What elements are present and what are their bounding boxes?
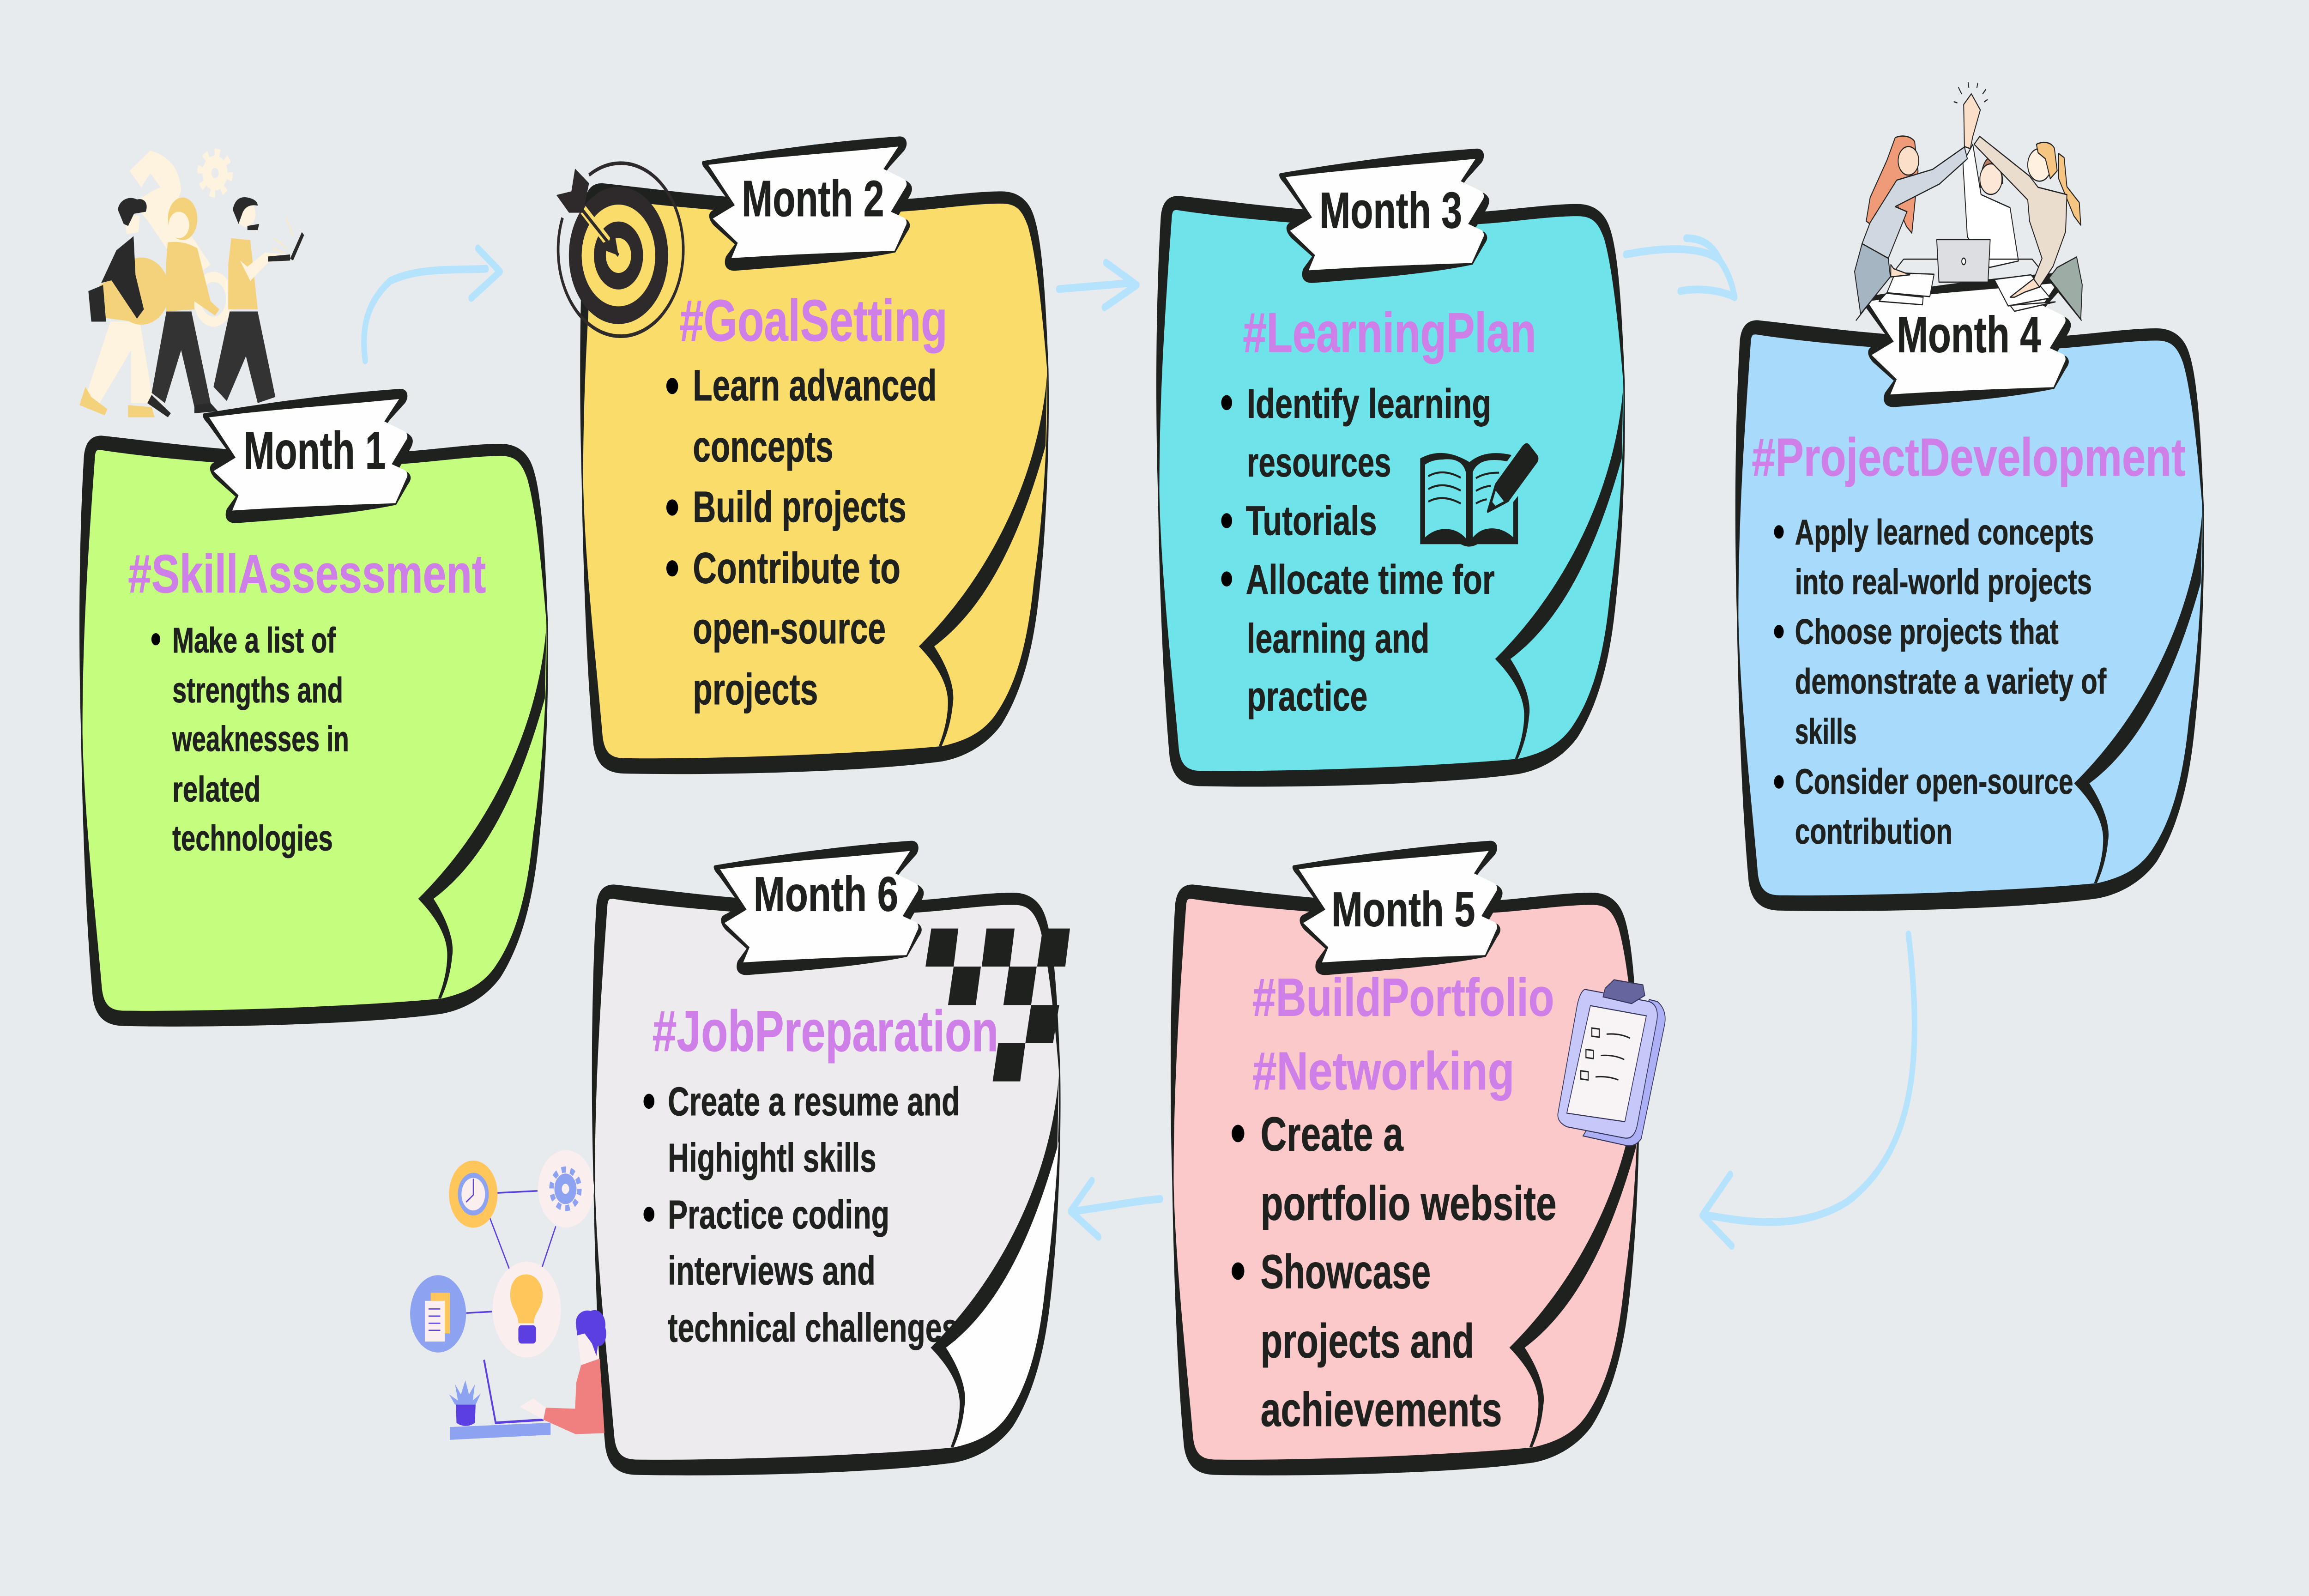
bullet list: strengths and (172, 671, 343, 710)
month tape (1279, 149, 1489, 283)
month tape: Month 5 (1331, 882, 1475, 937)
bullet list: into real-world projects (1795, 562, 2092, 602)
month tape: Month 6 (754, 866, 898, 922)
month tape (1861, 273, 2071, 407)
panel: month 2 (556, 136, 1049, 774)
icon: checkered flag pattern (925, 929, 1070, 1082)
bullet list: Apply learned concepts (1795, 513, 2094, 552)
icon: clipboard checklist (1558, 980, 1665, 1146)
note shape (580, 183, 1049, 774)
month tape (1293, 841, 1503, 975)
bullet list: projects (693, 665, 818, 714)
bullet list: Create a resume and (668, 1079, 960, 1124)
bullet list: Contribute to (693, 544, 901, 592)
note shape (1156, 196, 1625, 787)
month tape (702, 136, 912, 271)
bullet list (1221, 380, 1495, 719)
heading: #JobPreparation (653, 999, 998, 1064)
heading: networking: #Networking (1252, 1041, 1514, 1101)
bullet list: interviews and (668, 1249, 876, 1294)
heading: #LearningPlan (1243, 302, 1536, 364)
month tape (714, 841, 924, 975)
heading: #ProjectDevelopment (1752, 427, 2186, 487)
bullet list: Choose projects that (1795, 612, 2059, 652)
bullet list: learning and (1247, 615, 1429, 661)
panel: month 6 (592, 841, 1070, 1475)
icon: target with dart (556, 163, 683, 336)
bullet list: Showcase (1261, 1245, 1431, 1299)
bullet list: open-source (693, 604, 886, 653)
arrow: month 4 to month 5 (1702, 934, 1915, 1246)
note shape (1171, 884, 1639, 1475)
arrow: month 5 to month 6 (1070, 1181, 1161, 1237)
bullet list: Make a list of (172, 621, 336, 660)
bullet list: Create a (1261, 1108, 1404, 1161)
bullet list: Practice coding (668, 1192, 889, 1237)
bullet list: Build projects (693, 482, 907, 532)
panel: month 5 (1171, 841, 1665, 1475)
bullet list: concepts (693, 422, 834, 471)
month tape: Month 1 (244, 421, 386, 480)
bullet list: projects and (1261, 1315, 1474, 1368)
heading: #GoalSetting (679, 288, 948, 353)
heading: build portfolio: #BuildPortfolio (1252, 967, 1554, 1028)
month tape (203, 389, 413, 523)
bullet list: contribution (1795, 812, 1952, 852)
bullet list (151, 621, 349, 858)
panel: month 1 (79, 389, 548, 1027)
bullet list: Highightl skills (668, 1136, 876, 1180)
arrow: month 3 to month 4 (1626, 238, 1735, 297)
bullet list (1232, 1108, 1557, 1437)
bullet list: achievements (1261, 1383, 1502, 1437)
bullet list: Consider open-source (1795, 762, 2073, 802)
arrow: month 1 to month 2 (364, 248, 500, 360)
panel: month 4 (1735, 83, 2204, 911)
bullet list: Identify learning (1247, 380, 1491, 427)
icon: open book with pen (1420, 443, 1538, 547)
bullet list: technologies (172, 819, 333, 858)
note shape (592, 884, 1061, 1475)
bullet list: practice (1247, 673, 1367, 719)
bullet list: technical challenges (668, 1306, 958, 1350)
bullet list: Tutorials (1246, 497, 1377, 544)
month tape: Month 3 (1319, 182, 1462, 239)
illustration: team high five (1855, 83, 2082, 320)
panel: month 3 (1156, 149, 1625, 787)
bullet list: skills (1795, 712, 1857, 751)
illustration: three people carrying a bulb and wrench (79, 151, 304, 417)
bullet list: portfolio website (1261, 1177, 1557, 1230)
bullet list: resources (1247, 439, 1391, 485)
bullet list: Learn advanced (693, 361, 937, 410)
month tape: Month 2 (742, 171, 884, 227)
heading: #SkillAssessment (128, 544, 486, 604)
bullet list: Allocate time for (1246, 556, 1495, 603)
bullet list (666, 361, 937, 714)
bullet list (1774, 513, 2107, 852)
note shape (79, 435, 548, 1027)
note shape (1735, 320, 2204, 911)
illustration: person at laptop with idea network (410, 1150, 606, 1440)
bullet list: related (172, 770, 260, 810)
bullet list: demonstrate a variety of (1795, 662, 2107, 701)
month label: Month 4 (1897, 307, 2041, 363)
bullet list (643, 1079, 960, 1350)
bullet list: weaknesses in (172, 719, 349, 759)
arrow: month 2 to month 3 (1059, 263, 1137, 308)
